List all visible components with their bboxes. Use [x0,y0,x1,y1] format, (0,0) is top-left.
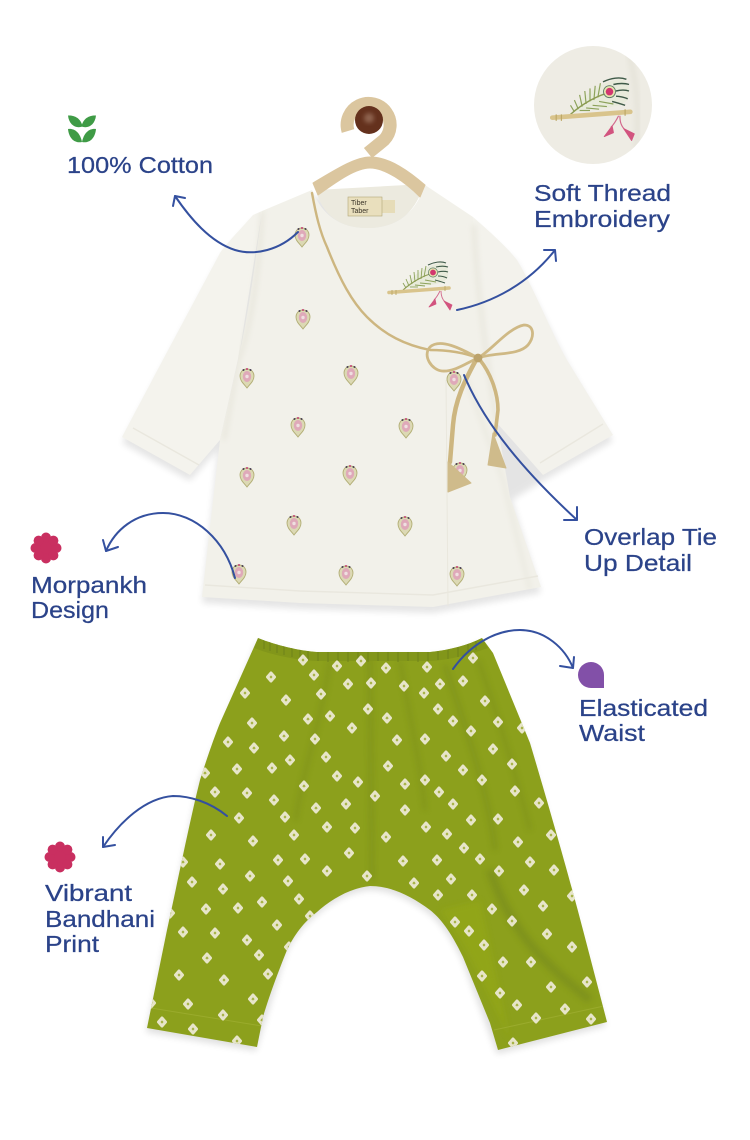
text: Morpankh Design [31,572,147,623]
right sleeve [473,217,613,475]
text: Vibrant Bandhani Print: Vibrant [45,880,133,906]
neck label [348,197,395,216]
arrow: bandhani [103,796,227,847]
embroidery close-up circle [534,46,652,164]
callout: Soft Thread Embroidery: Soft Thread [534,180,671,206]
icon: pink flower [30,532,62,564]
icon: pink flower [44,842,76,872]
arrow: morpankh [103,513,235,578]
callout: Morpankh Design [30,532,147,623]
icon: purple drop [578,662,604,688]
arrow: cotton [173,196,298,252]
fabric folds [260,215,496,410]
icon: green leaves [68,115,96,142]
neck label: Tiber [351,200,367,207]
text: Vibrant Bandhani Print: Bandhani [45,906,155,932]
text: Elasticated Waist [579,695,708,746]
arrow: embroidery [457,250,556,310]
elastic waistband [254,638,488,661]
left sleeve [122,211,262,475]
text: Elasticated Waist: Waist [579,720,646,746]
lighter patch [440,900,510,1040]
hem stitching [133,424,603,595]
wooden hanger [313,103,425,197]
kurta soft shadow [122,196,613,613]
gold cord tie [312,193,533,492]
callout: Elasticated Waist [578,662,708,746]
text: Morpankh Design: Morpankh [31,572,147,598]
front panel overlap edge [446,380,448,606]
callout: 100% Cotton [67,115,213,178]
embroidered motifs [232,227,467,586]
text: 100% Cotton: 100% Cotton [67,152,213,178]
callout: Soft Thread Embroidery: Embroidery [534,206,671,232]
leg hems [151,1006,604,1030]
close-up fabric fold [628,48,638,150]
pants folds and shading [148,638,604,1047]
hanger knob [355,106,383,134]
callout: Overlap Tie Up Detail [584,524,717,576]
neck label: Taber [351,208,369,215]
pants shape [147,638,607,1050]
text: Vibrant Bandhani Print [45,880,155,957]
inner back neck [316,184,424,228]
text: Vibrant Bandhani Print: Print [45,931,100,957]
text: Elasticated Waist: Elasticated [579,695,708,721]
callout: Vibrant Bandhani Print [44,842,155,957]
callout: Overlap Tie Up Detail: Up Detail [584,550,692,576]
callout: Soft Thread Embroidery [534,180,671,232]
feather and flute embroidery [389,262,452,310]
close-up feather [552,78,634,140]
arrow: elastic waist [453,630,574,669]
text: Morpankh Design: Design [31,597,109,623]
pants soft shadow [146,642,606,1054]
arrow: tie up [464,375,577,520]
callout: Overlap Tie Up Detail: Overlap Tie [584,524,717,550]
pants garment [146,638,607,1054]
kurta body [202,185,541,607]
kurta garment [122,103,613,613]
bandhani dots [148,654,594,1047]
